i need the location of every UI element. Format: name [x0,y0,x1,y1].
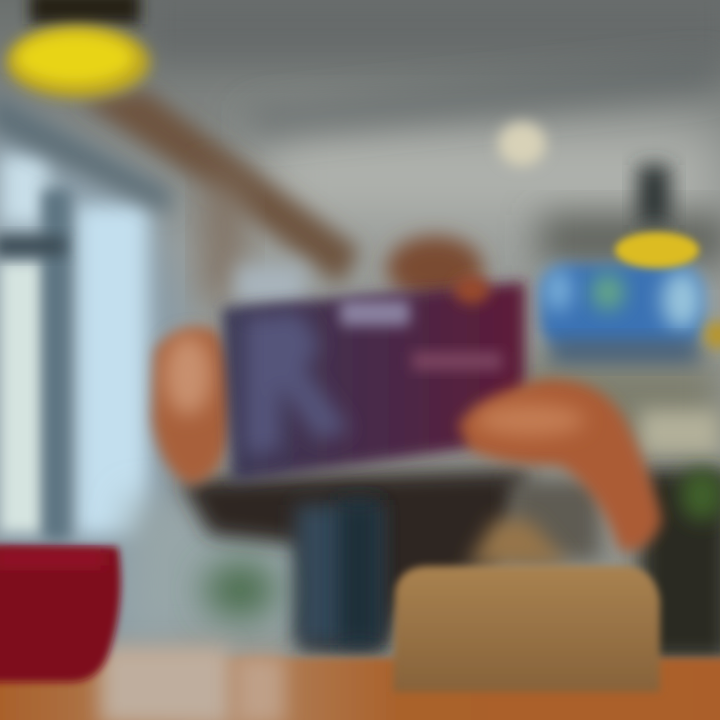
red cup [0,545,121,682]
blue globe [540,264,704,364]
purple card [222,276,525,482]
tan box [393,520,660,692]
right side dark plant area [510,469,720,660]
card label top [340,300,410,326]
green plant, lower centre [204,562,276,618]
window on the left [0,90,190,640]
wooden table [0,645,720,720]
person's hair [387,236,483,300]
yellow pendant lamp, top left [6,0,150,98]
background wall behind the figure [120,265,720,640]
ceiling light [498,122,546,166]
card orange reflection [454,276,490,304]
card letter mark [245,312,350,455]
dark torso below the card [180,470,530,650]
right hand [458,380,662,551]
left hand [152,328,234,485]
yellow pendant lamp, right [615,165,720,349]
wooden beam [80,90,360,300]
card label middle [412,352,502,370]
